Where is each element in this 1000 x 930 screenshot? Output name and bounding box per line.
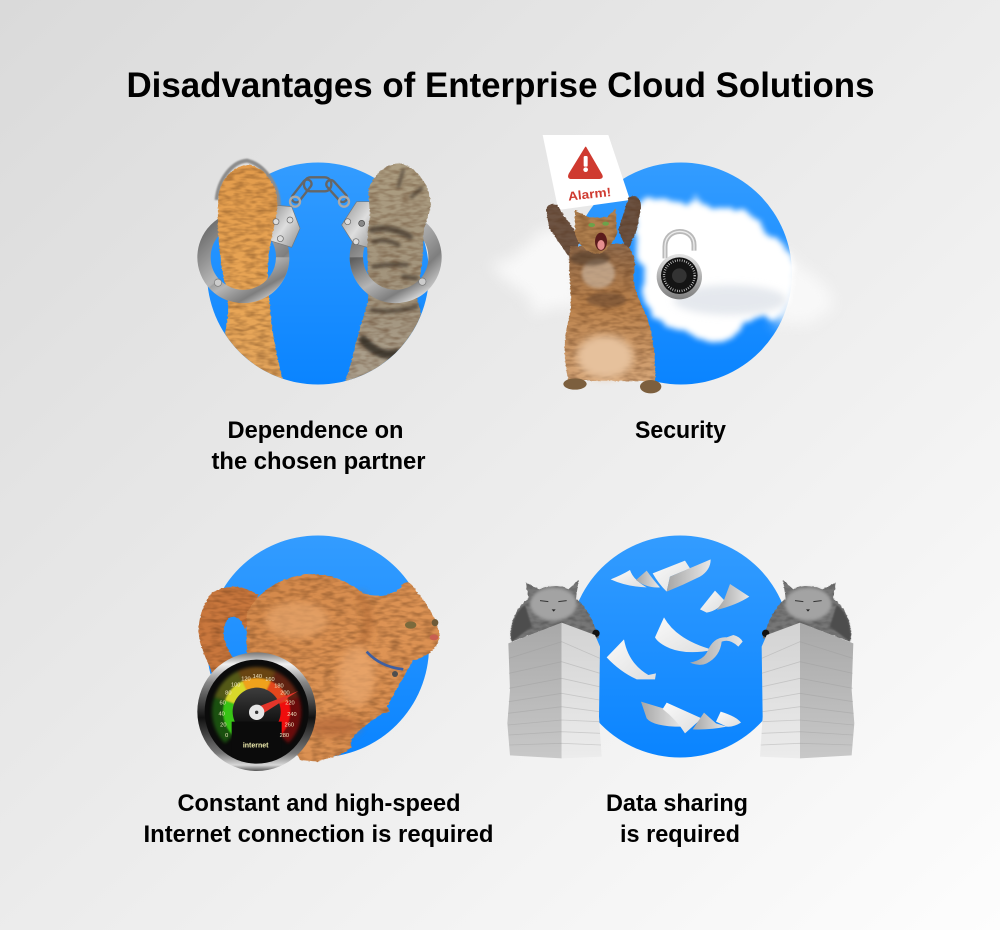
panel: data sharing — [507, 536, 854, 848]
handcuff plate right — [342, 202, 377, 250]
combination padlock — [657, 231, 702, 299]
label: internet — [144, 790, 494, 848]
speedometer numbers: 0 — [225, 733, 228, 739]
sign: alarm: Alarm! — [567, 185, 612, 204]
label: data sharing — [606, 790, 748, 848]
panel: security — [493, 135, 838, 444]
speedometer numbers — [219, 674, 297, 739]
handcuff ring back: right — [356, 218, 435, 297]
handcuff ring front — [214, 217, 426, 296]
label: dependence — [212, 417, 426, 475]
speedometer numbers: 40 — [219, 711, 225, 717]
paper stacks, grey cats and flying sheets — [507, 559, 854, 758]
ginger cat shading — [265, 593, 375, 737]
speedometer numbers: 80 — [225, 691, 231, 697]
speedometer numbers: 180 — [274, 683, 284, 689]
speedometer needle — [258, 691, 298, 714]
orange paw — [218, 165, 283, 383]
sign: alarm — [543, 135, 630, 210]
flying sheet: bottom — [641, 702, 741, 733]
flying sheet: top — [611, 559, 711, 592]
speedometer colour scale — [222, 677, 292, 736]
cloud outside circle — [493, 226, 838, 327]
speedometer numbers: 200 — [280, 690, 290, 696]
speedometer numbers: 220 — [285, 701, 295, 707]
cat standing with raised arms — [546, 196, 661, 393]
grey halo behind orange paw — [217, 161, 279, 207]
title: Disadvantages of Enterprise Cloud Solutions — [126, 66, 874, 105]
label: data sharing: is required — [620, 821, 740, 848]
blue circle: dependence — [207, 162, 429, 384]
flying sheet: left — [607, 639, 656, 679]
ginger cat face — [367, 619, 438, 677]
blue circle: security — [570, 162, 792, 384]
cloud shadow — [673, 285, 787, 315]
blue circle: internet — [207, 536, 429, 758]
label: dependence: Dependence on — [228, 417, 404, 444]
handcuff ring back: left — [204, 218, 283, 297]
speedometer numbers: 280 — [280, 733, 289, 739]
speedometer numbers: 240 — [287, 712, 297, 718]
speedometer numbers: 140 — [253, 674, 262, 680]
speedometer numbers: 60 — [220, 701, 226, 707]
speedometer numbers: 20 — [220, 722, 226, 728]
speedometer numbers: 100 — [231, 682, 240, 688]
cat and paper stack: right — [760, 580, 854, 758]
handcuff chain — [290, 177, 349, 207]
cloud main — [633, 198, 792, 342]
label: data sharing: Data sharing — [606, 790, 748, 817]
handcuffed paws illustration — [204, 161, 435, 383]
running cat and speedometer illustration — [197, 574, 439, 771]
blue circle: data sharing — [569, 536, 791, 758]
speedometer — [197, 652, 316, 771]
flying sheet: upper right — [700, 584, 749, 613]
ginger cat tail — [199, 587, 258, 675]
label: internet: Constant and high-speed — [178, 790, 460, 817]
panel: high-speed internet — [144, 536, 494, 848]
speedometer numbers: 260 — [285, 722, 294, 728]
label: dependence: the chosen partner — [212, 448, 426, 475]
label: security: Security — [635, 417, 727, 444]
ginger cat body — [247, 574, 439, 762]
speedometer numbers: 120 — [241, 676, 251, 682]
label: internet: Internet connection is required — [144, 821, 494, 848]
speedometer label: internet — [243, 742, 269, 749]
alarm cat and cloud illustration — [493, 135, 838, 393]
panel: dependence on the chosen partner — [204, 161, 435, 475]
handcuff plate left — [270, 205, 300, 247]
speedometer numbers: 160 — [265, 677, 275, 683]
flying sheet: centre — [655, 617, 743, 665]
tabby paw — [345, 163, 431, 383]
cat and paper stack: left — [507, 580, 602, 758]
